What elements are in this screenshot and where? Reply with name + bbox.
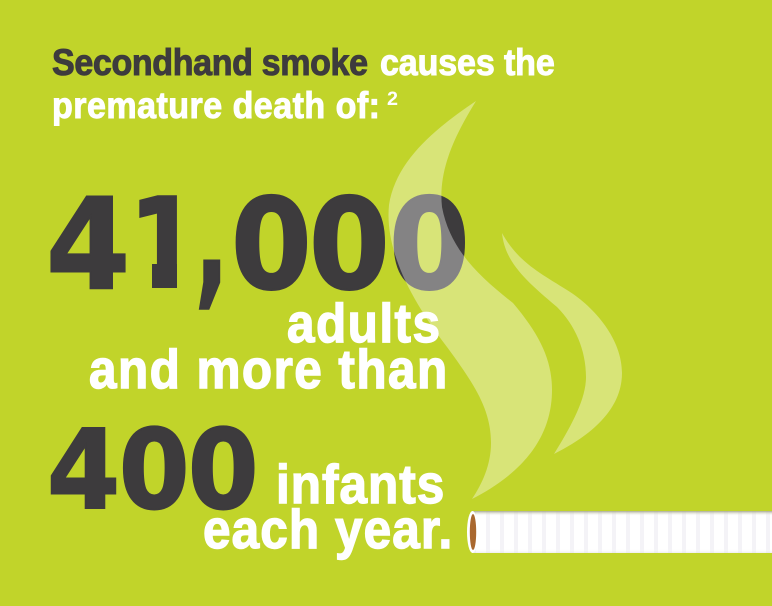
big number: 41,000: 0	[309, 171, 390, 318]
heading	[52, 42, 555, 126]
heading: 2	[387, 89, 398, 110]
big number: 41,000: ,	[195, 155, 229, 323]
big number: 41,000: 4	[46, 172, 130, 319]
big number: 400: 0	[188, 406, 258, 534]
heading: causes the	[380, 42, 555, 83]
label: each year.: each year.	[203, 500, 452, 561]
icon: cigarette	[467, 511, 772, 553]
smoke: large plume	[388, 101, 552, 499]
big number: 41,000	[50, 194, 465, 310]
big number: 400: 4	[47, 407, 120, 535]
label: and more than: and more than	[89, 340, 447, 401]
infographic	[50, 48, 772, 560]
smoke: small plume	[502, 233, 622, 454]
big number: 41,000: 1	[128, 172, 200, 319]
label: adults: adults	[287, 294, 440, 355]
label: infants: infants	[276, 455, 444, 516]
heading: Secondhand smoke	[52, 42, 368, 83]
big number: 41,000: 0	[231, 171, 312, 318]
big number: 41,000: 0	[389, 171, 470, 318]
big number: 400	[47, 406, 258, 535]
big number: 400: 0	[119, 406, 189, 534]
heading: premature death of:	[52, 85, 380, 126]
